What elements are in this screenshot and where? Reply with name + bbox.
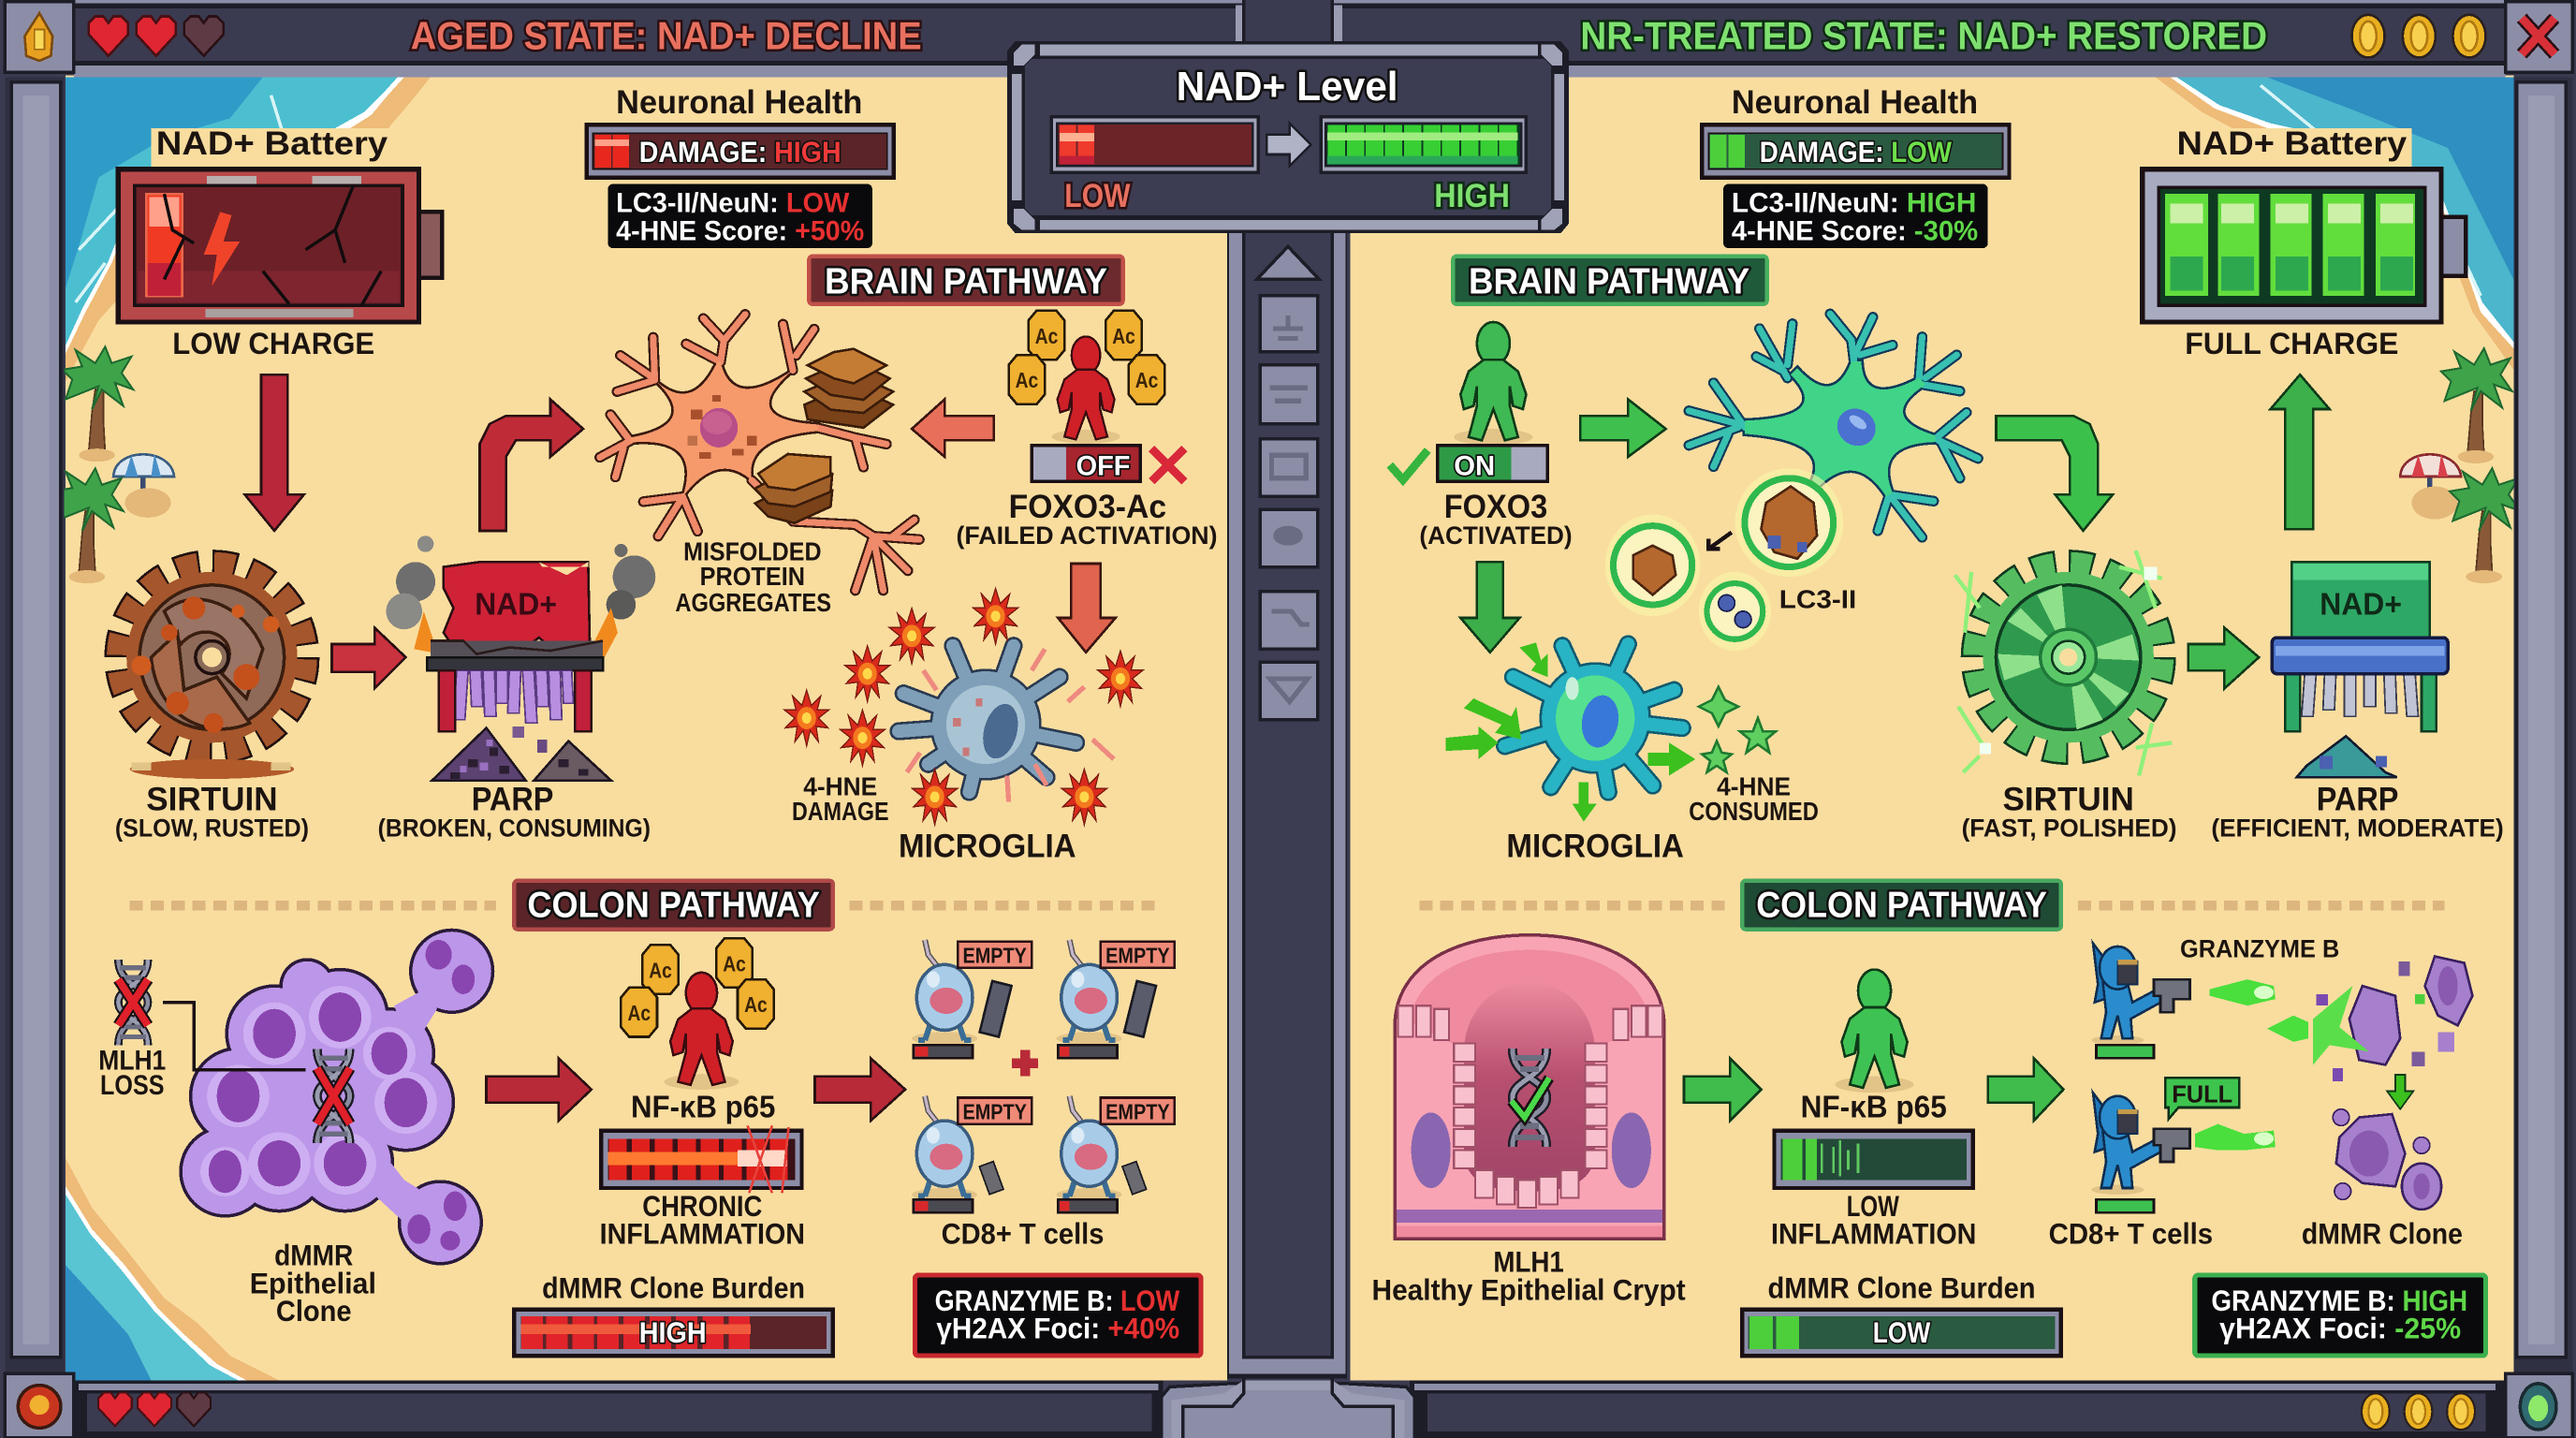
LEFT: parp label [378, 781, 651, 842]
RIGHT: sirtuin label: SIRTUIN [2002, 781, 2134, 817]
LEFT: damaged microglia [899, 646, 1076, 792]
RIGHT: on toggle: ON [1454, 450, 1495, 481]
dna with check [1512, 1049, 1549, 1147]
LEFT: stats box: 4-HNE Score: +50% [616, 215, 864, 246]
arrow [1266, 124, 1311, 166]
center column [1227, 213, 1347, 1379]
RIGHT: sirtuin gear [1955, 550, 2172, 775]
LEFT: clone burden bar [514, 1310, 833, 1356]
LEFT: foxo3 figure with acetyl groups [1009, 311, 1164, 444]
label low: LOW [1064, 178, 1131, 214]
label high: HIGH [1434, 178, 1510, 214]
button 2 [1260, 365, 1318, 424]
LEFT: exhausted t cell 2 [1057, 940, 1156, 1058]
LEFT: chronic inflammation label: CHRONIC [642, 1189, 762, 1223]
RIGHT: colon pathway badge: COLON PATHWAY [1756, 885, 2047, 925]
sparks [1955, 550, 2172, 775]
LEFT: arrow nf-kb to t cells [815, 1058, 905, 1121]
coins small [2362, 1393, 2475, 1430]
LEFT: sirtuin label [115, 781, 309, 842]
LEFT: 4-HNE damage label [792, 772, 889, 826]
RIGHT: active t cell 2 [2091, 1093, 2190, 1212]
LEFT: dMMR epithelial clone cluster [179, 929, 494, 1266]
RIGHT: full tag [2165, 1078, 2239, 1119]
RIGHT: foxo3 label: (ACTIVATED) [1419, 521, 1573, 550]
RIGHT: damage bar [1702, 125, 2009, 178]
RIGHT: foxo3 label [1419, 489, 1573, 550]
LEFT: misfolded protein label [675, 537, 831, 617]
RIGHT: full tag: FULL [2172, 1080, 2232, 1108]
beach: bottom-left shore [66, 1158, 279, 1380]
LEFT: brain pathway badge: BRAIN PATHWAY [825, 261, 1107, 301]
left rail [5, 77, 64, 1375]
button 6 [1260, 662, 1318, 720]
RIGHT: granzyme b label: GRANZYME B [2180, 933, 2339, 962]
RIGHT: healthy epithelial crypt [1395, 935, 1664, 1239]
RIGHT: arrow crypt to nf-kb [1684, 1058, 1761, 1121]
LEFT: neuronal health heading: Neuronal Health [616, 84, 862, 121]
LEFT: connector line [163, 1003, 305, 1070]
icon: scroll up [1257, 246, 1319, 279]
LEFT: empty tag 3: EMPTY [962, 1099, 1027, 1123]
RIGHT: LC3-II label: LC3-II [1779, 584, 1856, 613]
RIGHT: healthy microglia [1505, 644, 1682, 792]
LEFT: granzyme box [915, 1275, 1201, 1356]
RIGHT: brain pathway badge: BRAIN PATHWAY [1469, 261, 1749, 301]
shredded purple strips [453, 670, 574, 723]
LEFT: damage bar: DAMAGE: HIGH [639, 135, 842, 169]
RIGHT: stats box [1723, 184, 1988, 248]
LEFT: arrow sirtuin to parp [332, 627, 406, 688]
LEFT: microglia label: MICROGLIA [899, 828, 1076, 864]
LEFT: battery icon [118, 169, 442, 322]
close button [2506, 2, 2572, 72]
RIGHT: crypt label: MLH1 [1493, 1245, 1564, 1279]
LEFT: sirtuin label: (SLOW, RUSTED) [115, 813, 309, 842]
LEFT: empty tag 2: EMPTY [1105, 944, 1170, 968]
bottom center connector [1162, 1373, 1414, 1438]
button 4 [1260, 509, 1318, 567]
RIGHT: crypt label: Healthy Epithelial Crypt [1372, 1272, 1686, 1306]
panel: aged state [52, 76, 1227, 1380]
RIGHT: check mark [1390, 450, 1427, 480]
coins [2351, 15, 2485, 57]
RIGHT: dying clones [2313, 957, 2472, 1081]
RIGHT: efficient shredder parp [2272, 562, 2448, 777]
LEFT: curved arrow parp to neuron [479, 400, 583, 531]
LEFT: plus sign [1012, 1050, 1038, 1077]
LEFT: damage bar [587, 125, 894, 178]
RIGHT: arrow nf-kb to t cells [1988, 1058, 2063, 1121]
RIGHT: consumed 4-HNE stars [1699, 687, 1776, 772]
RIGHT: active t cell 1 [2091, 944, 2190, 1058]
RIGHT: neuronal health heading: Neuronal Health [1732, 84, 1978, 121]
LEFT: exhausted t cell 3 [912, 1096, 1003, 1212]
LEFT: MLH1 loss label [98, 1046, 166, 1101]
RIGHT: stats box: LC3-II/NeuN: HIGH [1732, 187, 1976, 218]
RIGHT: battery label: NAD+ Battery [2177, 125, 2408, 162]
RIGHT: parp label: (EFFICIENT, MODERATE) [2211, 813, 2504, 842]
icon: palm tree 4 [2450, 468, 2520, 583]
LEFT: chronic inflammation label [600, 1189, 805, 1251]
lightning bolt [204, 212, 240, 286]
RIGHT: foxo3 label: FOXO3 [1444, 489, 1547, 525]
RIGHT: stats box: 4-HNE Score: -30% [1732, 215, 1978, 246]
LEFT: broken shredder parp [386, 536, 655, 781]
RIGHT: foxo3 figure [1454, 322, 1533, 446]
LEFT: 4-HNE explosions [784, 588, 1143, 825]
LEFT: parp label: PARP [472, 781, 553, 817]
RIGHT: crypt label [1372, 1245, 1686, 1306]
LEFT: arrow foxo3 to neuron [912, 400, 994, 457]
RIGHT: granzyme box: γH2AX Foci: -25% [2219, 1312, 2461, 1345]
LEFT: granzyme box: GRANZYME B: LOW [935, 1284, 1179, 1317]
LEFT: empty tag 1: EMPTY [962, 944, 1027, 968]
RIGHT: arrow foxo3 to microglia [1460, 562, 1519, 653]
RIGHT: inflammation bar [1775, 1131, 1973, 1188]
LEFT: misfolded protein label: MISFOLDED [683, 537, 822, 566]
RIGHT: parp label [2211, 781, 2504, 842]
icon: palm tree 1 [63, 346, 133, 462]
RIGHT: arrow foxo3 to neuron [1580, 400, 1666, 457]
LEFT: off toggle [1032, 446, 1140, 481]
LEFT: sirtuin label: SIRTUIN [146, 781, 278, 817]
RIGHT: dmmr clone label: dMMR Clone [2302, 1217, 2463, 1251]
LEFT: 4-HNE damage label: 4-HNE [803, 772, 877, 801]
LEFT: battery label: NAD+ Battery [156, 125, 388, 162]
LEFT: exhausted t cell 4 [1057, 1096, 1147, 1212]
LEFT: MLH1 loss label: MLH1 [98, 1046, 166, 1077]
beach: top-right shore [2156, 77, 2513, 370]
RIGHT: clone burden bar [1742, 1310, 2061, 1356]
LEFT: nf-kb label: NF-κB p65 [631, 1091, 775, 1125]
top bar: aged state [5, 0, 1245, 77]
RIGHT: arrow sirtuin to parp [2188, 627, 2259, 688]
LEFT: sirtuin gear [120, 565, 304, 779]
button 3 [1260, 439, 1318, 496]
LEFT: misfolded protein label: AGGREGATES [675, 588, 831, 617]
protein aggregate 2 [755, 454, 832, 523]
RIGHT: sirtuin label: (FAST, POLISHED) [1962, 813, 2177, 842]
RIGHT: microglia label: MICROGLIA [1506, 828, 1684, 864]
RIGHT: down arrow to dead clone [2387, 1075, 2413, 1109]
RIGHT: on toggle [1438, 446, 1547, 481]
LEFT: MLH1 loss label: LOSS [100, 1070, 165, 1101]
RIGHT: incoming green arrows [1445, 642, 1695, 822]
RIGHT: full charge label: FULL CHARGE [2185, 327, 2398, 360]
LEFT: 4-HNE damage label: DAMAGE [792, 797, 889, 826]
LEFT: red x [1151, 448, 1184, 481]
protein aggregate 1 [804, 349, 893, 428]
LEFT: arrow to microglia [1058, 564, 1116, 653]
RIGHT: granzyme box [2195, 1275, 2485, 1356]
RIGHT: granzyme beams [2195, 979, 2308, 1151]
LEFT: stats box [607, 184, 872, 248]
title: treated: NR-TREATED STATE: NAD+ RESTORED [1580, 14, 2267, 58]
low bar [1051, 117, 1258, 172]
RIGHT: curved arrow to sirtuin [1996, 416, 2113, 531]
title: aged: AGED STATE: NAD+ DECLINE [411, 14, 922, 58]
RIGHT: 4-HNE consumed label: 4-HNE [1717, 772, 1791, 801]
RIGHT: autophagosomes [1605, 468, 1843, 651]
RIGHT: granzyme box: GRANZYME B: HIGH [2211, 1284, 2467, 1317]
RIGHT: 4-HNE consumed label: CONSUMED [1689, 797, 1819, 826]
RIGHT: low inflammation label: INFLAMMATION [1771, 1217, 1976, 1251]
RIGHT: damage bar: DAMAGE: LOW [1760, 135, 1952, 169]
LEFT: broken shredder parp: NAD+ [475, 587, 557, 622]
RIGHT: battery icon [2143, 169, 2466, 322]
button 1 [1260, 296, 1318, 352]
RIGHT: healthy neuron [1689, 314, 1978, 537]
LEFT: clone label: Clone [276, 1294, 352, 1328]
LEFT: foxo3-ac label: FOXO3-Ac [1009, 489, 1166, 525]
icon: beach umbrella red [2400, 453, 2461, 520]
LEFT: clone burden bar: HIGH [639, 1315, 707, 1349]
hearts [89, 17, 224, 56]
LEFT: parp label: (BROKEN, CONSUMING) [378, 813, 651, 842]
heading: NAD+ Level: NAD+ Level [1177, 64, 1398, 110]
panel: treated state [1351, 76, 2520, 1380]
LEFT: foxo3-ac label: (FAILED ACTIVATION) [956, 521, 1218, 550]
LEFT: arrow clone to nf-kb [487, 1058, 592, 1121]
RIGHT: efficient shredder parp: NAD+ [2320, 587, 2402, 622]
RIGHT: low inflammation label [1771, 1189, 1976, 1251]
RIGHT: low inflammation label: LOW [1847, 1189, 1899, 1223]
RIGHT: apoptotic clone [2333, 1109, 2441, 1210]
right rail [2513, 77, 2572, 1375]
beach: top-left shore [66, 77, 431, 381]
LEFT: chronic inflammation label: INFLAMMATION [600, 1217, 805, 1251]
bottom bar: aged [5, 1373, 1164, 1438]
RIGHT: sirtuin label [1962, 781, 2177, 842]
LEFT: clone burden heading: dMMR Clone Burden [542, 1271, 805, 1305]
LEFT: stats box: LC3-II/NeuN: LOW [616, 187, 850, 218]
icon: palm tree 3 [2441, 348, 2512, 463]
RIGHT: clone burden bar: LOW [1873, 1315, 1930, 1349]
LEFT: MLH1 loss dna [118, 960, 148, 1045]
hearts small [98, 1393, 211, 1426]
RIGHT: arrow to battery [2271, 374, 2330, 529]
icon: palm tree 2 [52, 468, 124, 583]
RIGHT: nf-kb figure [1835, 970, 1914, 1093]
NAD+ level box [1007, 41, 1569, 233]
icon: beach umbrella [113, 453, 174, 518]
LEFT: low charge label: LOW CHARGE [172, 327, 374, 360]
RIGHT: parp label: PARP [2317, 781, 2398, 817]
LEFT: dna in clone [317, 1049, 350, 1143]
RIGHT: cd8 label: CD8+ T cells [2049, 1217, 2213, 1251]
LEFT: clone label: Epithelial [250, 1266, 376, 1299]
corner box with green gem [2506, 1373, 2572, 1438]
bottom bar: treated [1410, 1373, 2572, 1438]
LEFT: arrow to sirtuin [245, 374, 304, 531]
LEFT: clone label: dMMR [274, 1239, 354, 1272]
RIGHT: clone burden heading: dMMR Clone Burden [1767, 1271, 2036, 1305]
RIGHT: nf-kb label: NF-κB p65 [1801, 1091, 1947, 1125]
LEFT: misfolded protein label: PROTEIN [700, 562, 805, 591]
LEFT: exhausted t cell 1 [912, 940, 1012, 1058]
LEFT: foxo3-ac label [956, 489, 1218, 550]
LEFT: colon pathway badge: COLON PATHWAY [527, 885, 820, 925]
button 5 [1260, 592, 1318, 649]
LEFT: cd8 label: CD8+ T cells [942, 1217, 1104, 1251]
LEFT: empty tag 4: EMPTY [1105, 1099, 1170, 1123]
corner box with red emblem [5, 1373, 74, 1438]
RIGHT: 4-HNE consumed label [1689, 772, 1819, 826]
LEFT: granzyme box: γH2AX Foci: +40% [936, 1312, 1179, 1345]
top bar: treated state [1331, 0, 2572, 77]
LEFT: inflammation bar [601, 1125, 801, 1193]
high bar [1321, 117, 1526, 172]
corner box with flame icon [5, 2, 74, 72]
LEFT: clone label [250, 1239, 376, 1328]
LEFT: off toggle: OFF [1076, 450, 1131, 481]
LEFT: neuron with aggregates [600, 315, 919, 591]
LEFT: nf-kb figure with acetyl groups [621, 938, 774, 1090]
